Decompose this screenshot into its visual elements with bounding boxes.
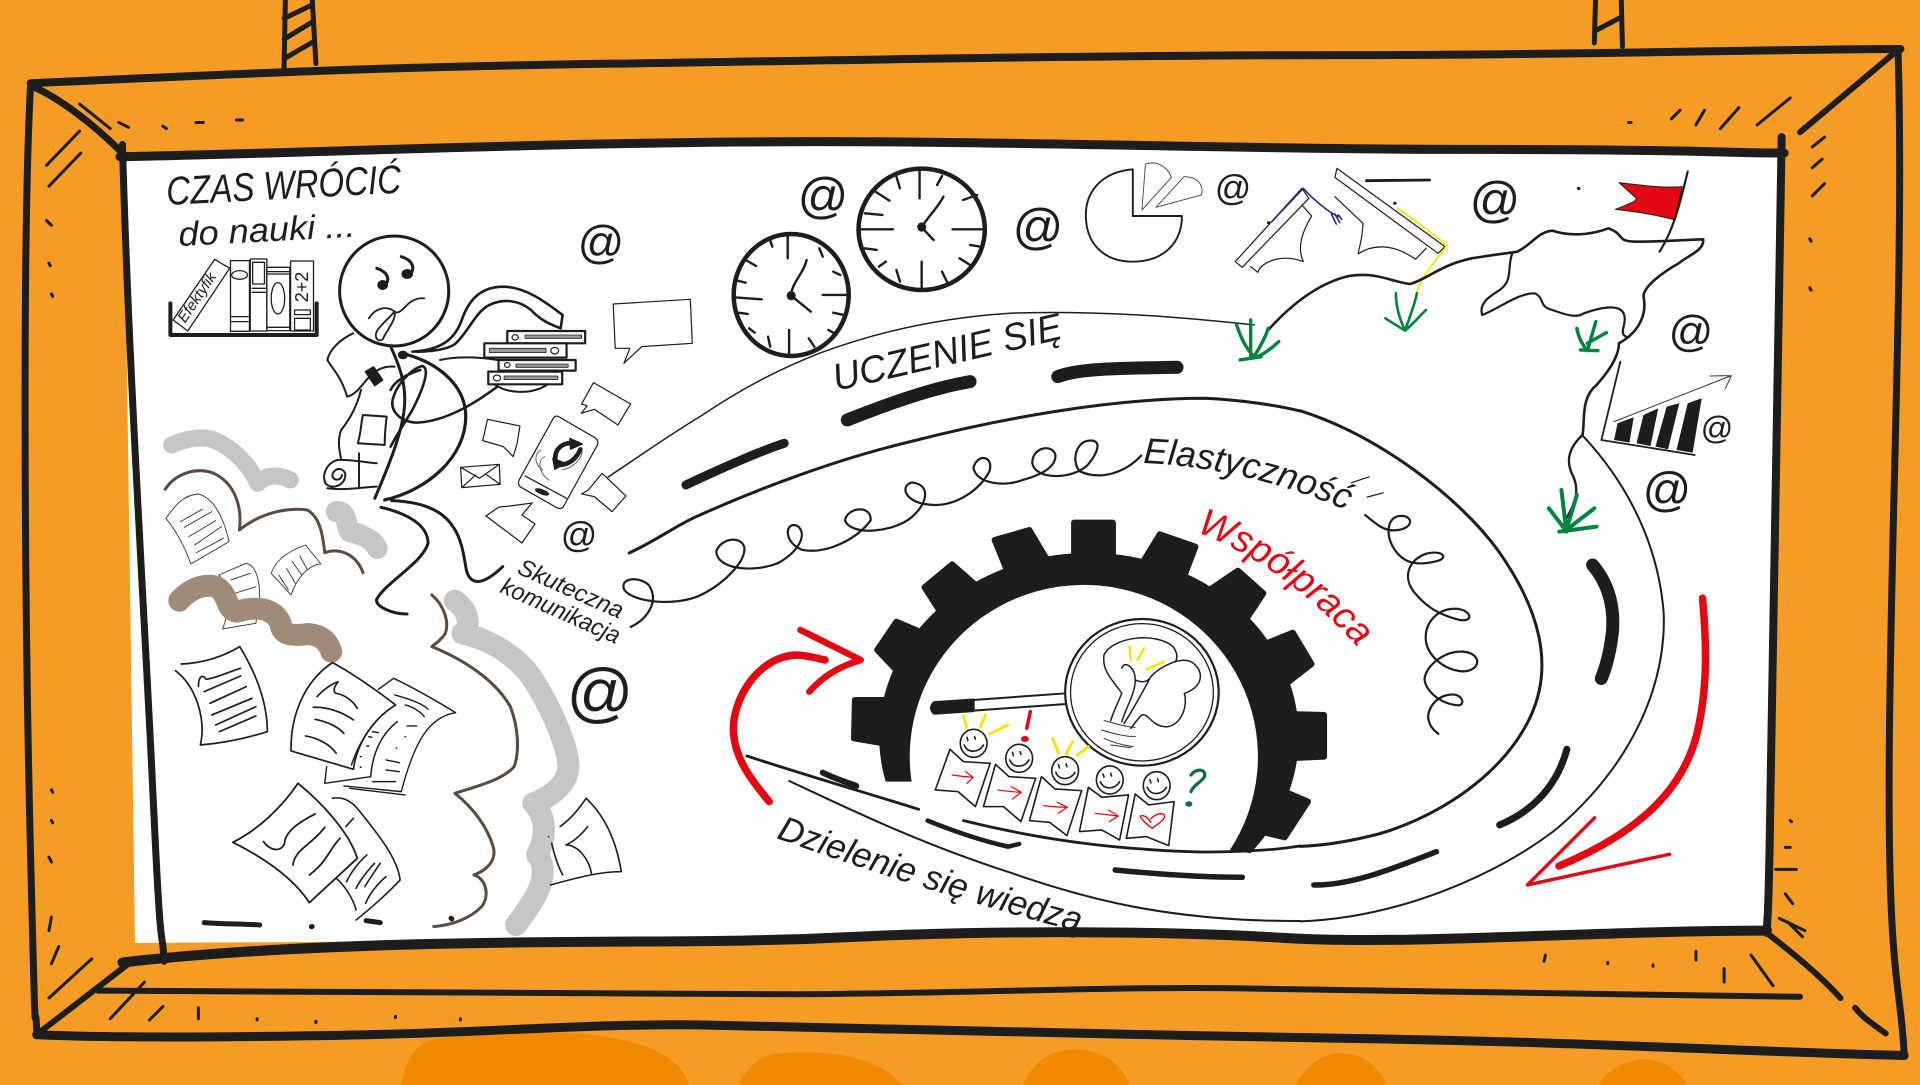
grass 2 xyxy=(1385,293,1426,331)
@ symbols: @ xyxy=(566,655,634,729)
red arrow shaft xyxy=(1559,598,1706,866)
upper road edge xyxy=(608,312,1254,477)
@ symbols: @ xyxy=(578,216,624,268)
phone xyxy=(518,416,598,509)
graduation cap 1 xyxy=(1235,188,1312,272)
server stack xyxy=(484,331,585,384)
tag xyxy=(366,367,382,385)
yellow bulb rays xyxy=(1129,647,1164,669)
gear body xyxy=(879,553,1299,853)
brown line xyxy=(165,471,363,573)
brown blob xyxy=(179,586,331,652)
outer road edge xyxy=(1300,436,1664,921)
@ symbols: @ xyxy=(1643,464,1691,517)
lower road segments xyxy=(747,756,919,809)
@ symbols: @ xyxy=(1669,307,1713,356)
label: Współpraca: Współpraca xyxy=(1202,508,1370,646)
whiteboard panel xyxy=(124,143,1780,943)
roads, mountain and top row icons xyxy=(608,163,1731,553)
title: Czas wrócić do nauki: CZAS WRÓCIĆ xyxy=(165,157,403,214)
@ symbols: @ xyxy=(1215,167,1251,208)
accent marks over Elastyczność xyxy=(1351,477,1383,497)
label: Dzielenie się wiedzą: Dzielenie się wiedzą xyxy=(776,817,1081,938)
eye dots xyxy=(378,270,412,289)
flag dot xyxy=(1577,187,1580,190)
paper 5 middle dots xyxy=(352,713,405,777)
phone sync arrows xyxy=(555,443,580,465)
eyes xyxy=(377,257,413,285)
phone button xyxy=(535,488,550,496)
large speech bubble xyxy=(613,299,692,363)
black curve 1 xyxy=(376,507,428,614)
book spine labels xyxy=(174,268,312,326)
clock 1 xyxy=(734,234,849,356)
cap dash and dots xyxy=(1268,180,1430,223)
mouth and tongue xyxy=(369,298,424,340)
neck knot xyxy=(398,351,408,359)
lens inner ring xyxy=(1071,624,1213,761)
paper 3 xyxy=(219,563,260,629)
person 2 xyxy=(983,744,1036,822)
flying papers and handwriting strokes xyxy=(165,438,621,927)
decorative bumps below the frame xyxy=(402,1033,1687,1085)
person 3 xyxy=(1029,757,1082,836)
speech bubble 4 xyxy=(582,473,626,512)
@ symbols: @ xyxy=(798,168,848,224)
brown cloud outline xyxy=(432,595,518,927)
road dash 3 xyxy=(1314,852,1436,885)
paper 5 back xyxy=(325,678,456,795)
pie chart xyxy=(1086,169,1182,262)
magnifying glass handle xyxy=(973,693,1066,711)
@ symbols: @ xyxy=(561,514,597,555)
spiral connecting the labels xyxy=(623,441,1141,627)
flag xyxy=(1615,183,1682,220)
cable to server xyxy=(440,357,547,392)
label: Uczenie się: UCZENIE SIĘ xyxy=(829,306,1067,400)
light bulb and cloud xyxy=(1104,638,1200,728)
speech bubble 2 xyxy=(581,383,631,425)
back arc xyxy=(385,354,466,500)
speech bubble 3 xyxy=(483,419,520,457)
road dash 2 xyxy=(1500,749,1567,825)
person 5 xyxy=(1126,772,1174,846)
red arrow head outline xyxy=(1527,818,1670,885)
person 4 xyxy=(1079,766,1129,840)
book spine labels: Efektyfik xyxy=(174,268,221,326)
chart arrow xyxy=(1614,376,1731,422)
bottom dashes xyxy=(204,918,452,927)
bulb base xyxy=(1102,721,1135,748)
road dashes xyxy=(686,443,784,485)
paper 6 front xyxy=(233,783,357,903)
paper 2 xyxy=(271,545,321,595)
@ symbols: @ xyxy=(1470,172,1520,228)
right arm loop xyxy=(391,366,497,447)
magnifying glass handle grip xyxy=(931,700,973,713)
grass 1 xyxy=(1237,320,1279,360)
@ symbols xyxy=(561,167,1733,729)
green question mark xyxy=(1185,770,1205,807)
speech bubbles, envelope and phone xyxy=(461,299,692,512)
grey thick cloud xyxy=(455,601,569,925)
red arrow head xyxy=(800,630,861,692)
red curved arrow xyxy=(733,655,825,802)
black curve 2 xyxy=(392,501,503,581)
paper 7 back xyxy=(332,798,400,920)
title: Czas wrócić do nauki: do nauki ... xyxy=(177,207,356,254)
inner road edge xyxy=(1300,411,1542,846)
paper 4 xyxy=(175,647,267,745)
yellow idea rays xyxy=(963,715,1088,755)
grass 4 xyxy=(1549,490,1597,532)
grey blob xyxy=(336,512,377,548)
head xyxy=(340,236,449,346)
gear teeth xyxy=(854,523,1324,837)
torso xyxy=(375,347,405,498)
phone wave lines xyxy=(536,450,582,480)
title: Czas wrócić do nauki xyxy=(165,157,403,254)
yellow tassel xyxy=(1398,208,1447,292)
@ symbols: @ xyxy=(1701,410,1733,446)
mountain ridge and fork xyxy=(1268,228,1703,435)
bookshelf xyxy=(170,259,317,335)
server lights xyxy=(493,335,559,381)
server bars xyxy=(489,335,582,380)
speech bubble 5 xyxy=(486,503,535,543)
paper 8 xyxy=(549,798,621,885)
gear and scene xyxy=(733,523,1324,921)
grass 3 xyxy=(1577,322,1606,351)
book spine labels: 2+2 xyxy=(292,272,312,302)
grey squiggle xyxy=(172,438,290,483)
label: Skuteczna komunikacja: komunikacja xyxy=(497,573,624,650)
fork left branch xyxy=(1566,435,1582,518)
graduation cap 2 xyxy=(1335,168,1445,259)
@ symbols: @ xyxy=(1013,199,1063,255)
flag pole xyxy=(1660,172,1688,252)
pie slices xyxy=(1142,163,1202,210)
paper 5 front xyxy=(291,663,396,769)
paper 1 xyxy=(166,494,229,564)
clock 2 xyxy=(859,169,985,290)
label: Elastyczność: Elastyczność xyxy=(1144,438,1356,508)
spiral right part xyxy=(1365,515,1477,734)
person 1 xyxy=(935,729,990,807)
mountain underside xyxy=(1481,253,1626,337)
magnifying glass lens xyxy=(1065,619,1219,766)
red exclamation mark xyxy=(1021,712,1030,742)
blue tassel xyxy=(1272,188,1342,224)
envelope xyxy=(461,464,500,488)
label: Skuteczna komunikacja: Skuteczna xyxy=(514,554,628,624)
cables xyxy=(412,287,563,352)
road dash 1 xyxy=(1593,565,1613,679)
chart bars xyxy=(1614,398,1702,453)
figure: stick person with servers xyxy=(324,236,585,500)
chart axes xyxy=(1601,362,1695,455)
phone arrow heads xyxy=(553,438,582,469)
right side road, spiral and red arrow xyxy=(1300,411,1706,921)
inner road edge xyxy=(629,398,1300,553)
shawl and scroll xyxy=(324,333,395,489)
